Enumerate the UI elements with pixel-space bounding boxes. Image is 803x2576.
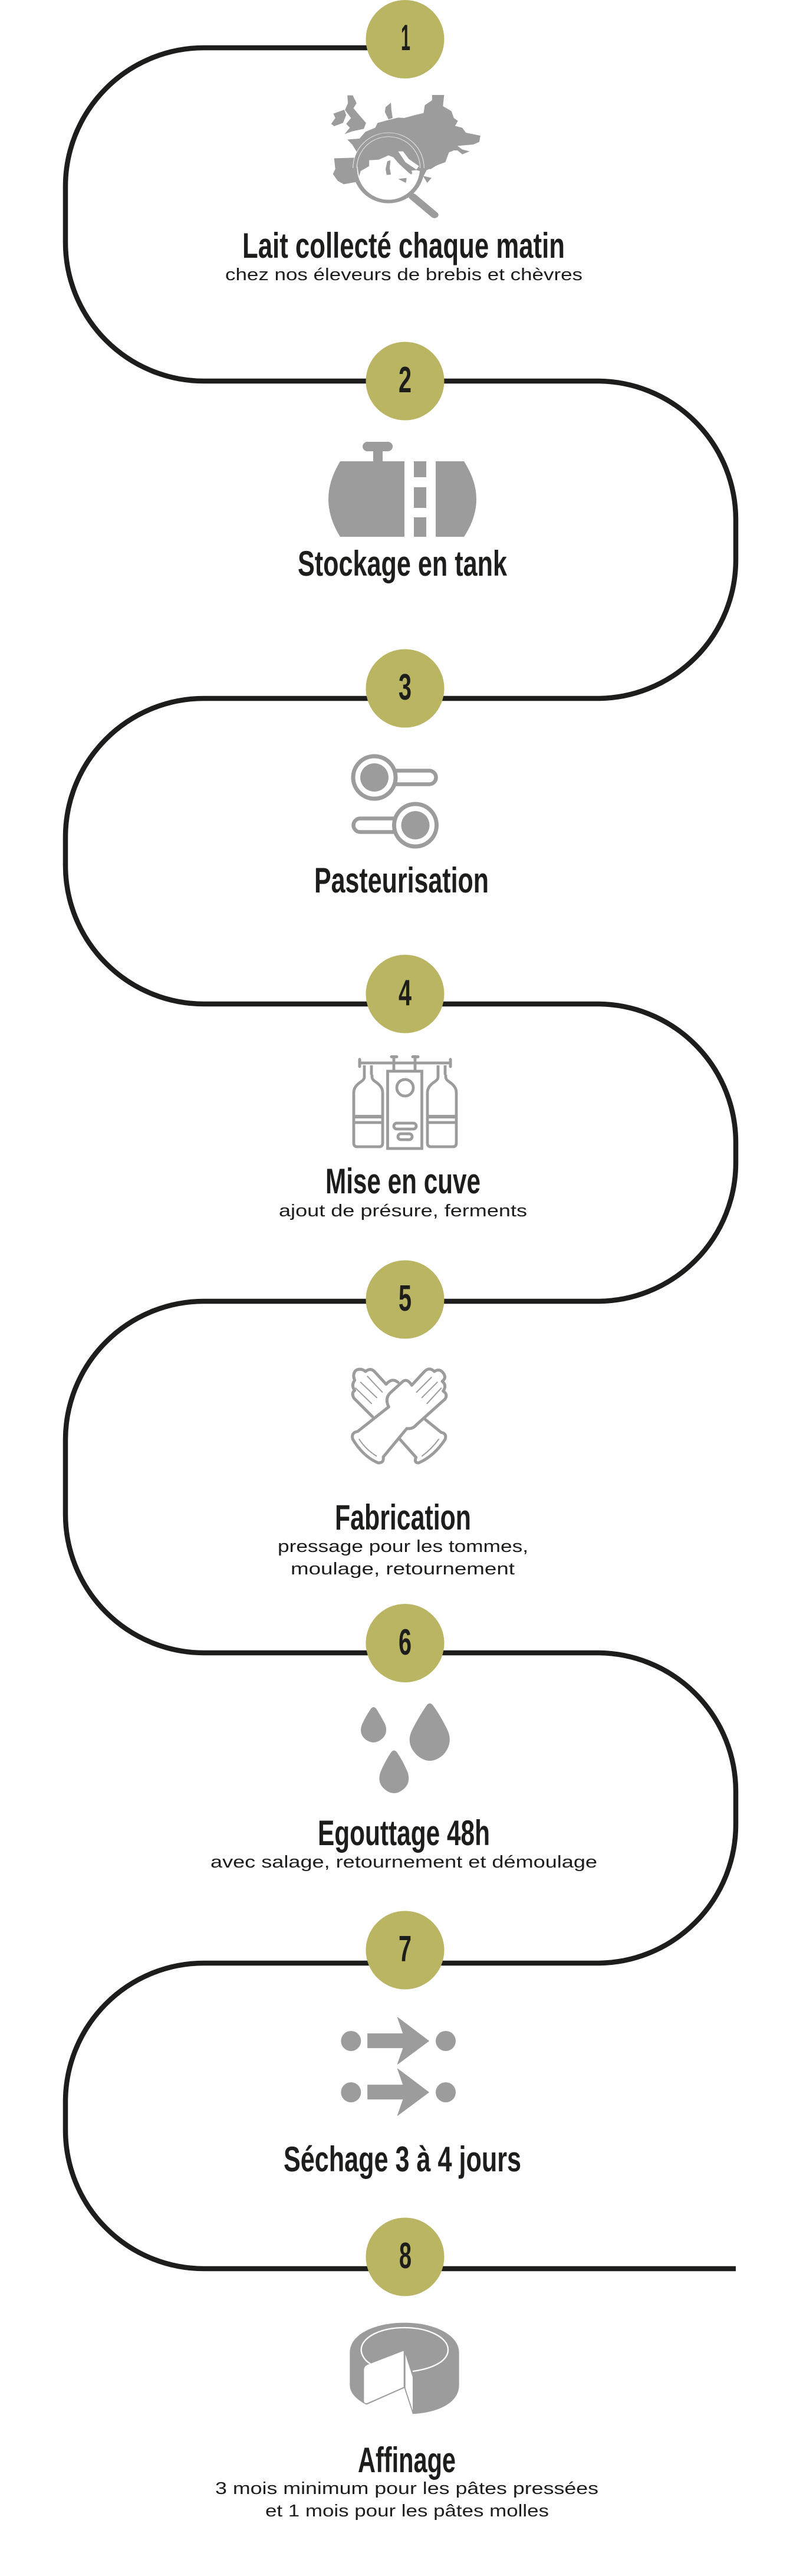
heading 7: Séchage 3 à 4 jours <box>284 2139 521 2179</box>
number badge 4: 4 <box>399 973 412 1013</box>
heading 4: Mise en cuve <box>325 1161 481 1201</box>
icon: three drops <box>361 1704 450 1793</box>
heading 8: Affinage <box>358 2440 456 2480</box>
subtext 4: ajout de présure, ferments <box>279 1202 527 1220</box>
subtext 8: 3 mois minimum pour les pâtes pressées <box>215 2479 598 2498</box>
subtext 1: chez nos éleveurs de brebis et chèvres <box>225 265 582 284</box>
step 2: tank storage <box>298 342 507 583</box>
step 3: pasteurisation <box>314 649 489 900</box>
subtext 8 <box>215 2479 598 2521</box>
subtext 5: moulage, retournement <box>291 1560 515 1579</box>
number badge 3: 3 <box>399 667 412 708</box>
subtext 5: pressage pour les tommes, <box>278 1537 528 1556</box>
number badge 5 <box>366 1260 445 1339</box>
number badge 1: 1 <box>401 18 410 58</box>
number badge 6 <box>366 1604 445 1682</box>
number badge 4 <box>366 954 445 1033</box>
winding timeline path <box>65 48 736 2269</box>
number badge 7 <box>366 1911 445 1989</box>
step 5: fabrication <box>278 1260 528 1579</box>
number badge 2 <box>366 342 445 420</box>
heading 3: Pasteurisation <box>314 861 489 900</box>
heading 1: Lait collecté chaque matin <box>242 226 565 265</box>
subtext 5 <box>278 1537 528 1579</box>
icon: arrows and dots <box>341 2017 456 2115</box>
icon: storage tank <box>328 442 476 537</box>
icon: Europe map with magnifying glass <box>331 95 481 215</box>
number badge 8: 8 <box>399 2236 412 2276</box>
number badge 7: 7 <box>399 1929 412 1970</box>
step 7: drying <box>284 1911 521 2179</box>
icon: two switches <box>353 756 436 846</box>
number badge 2: 2 <box>399 360 412 401</box>
number badge 6: 6 <box>399 1622 412 1663</box>
number badge 3 <box>366 649 445 728</box>
icon: crossed gloves <box>353 1369 446 1463</box>
icon: cheese wheel <box>350 2323 459 2414</box>
number badge 1 <box>366 0 445 78</box>
subtext 6: avec salage, retournement et démoulage <box>210 1853 597 1872</box>
heading 5: Fabrication <box>335 1498 471 1537</box>
subtext 8: et 1 mois pour les pâtes molles <box>265 2502 549 2521</box>
number badge 5: 5 <box>399 1278 412 1319</box>
icon: bottles and vat <box>354 1057 456 1148</box>
heading 2: Stockage en tank <box>298 544 507 583</box>
number badge 8 <box>366 2218 445 2296</box>
step 1: milk collection <box>225 0 582 284</box>
step 6: draining <box>210 1604 597 1872</box>
heading 6: Egouttage 48h <box>318 1813 490 1853</box>
step 4: vat <box>279 954 527 1220</box>
step 8: ripening <box>215 2218 598 2521</box>
